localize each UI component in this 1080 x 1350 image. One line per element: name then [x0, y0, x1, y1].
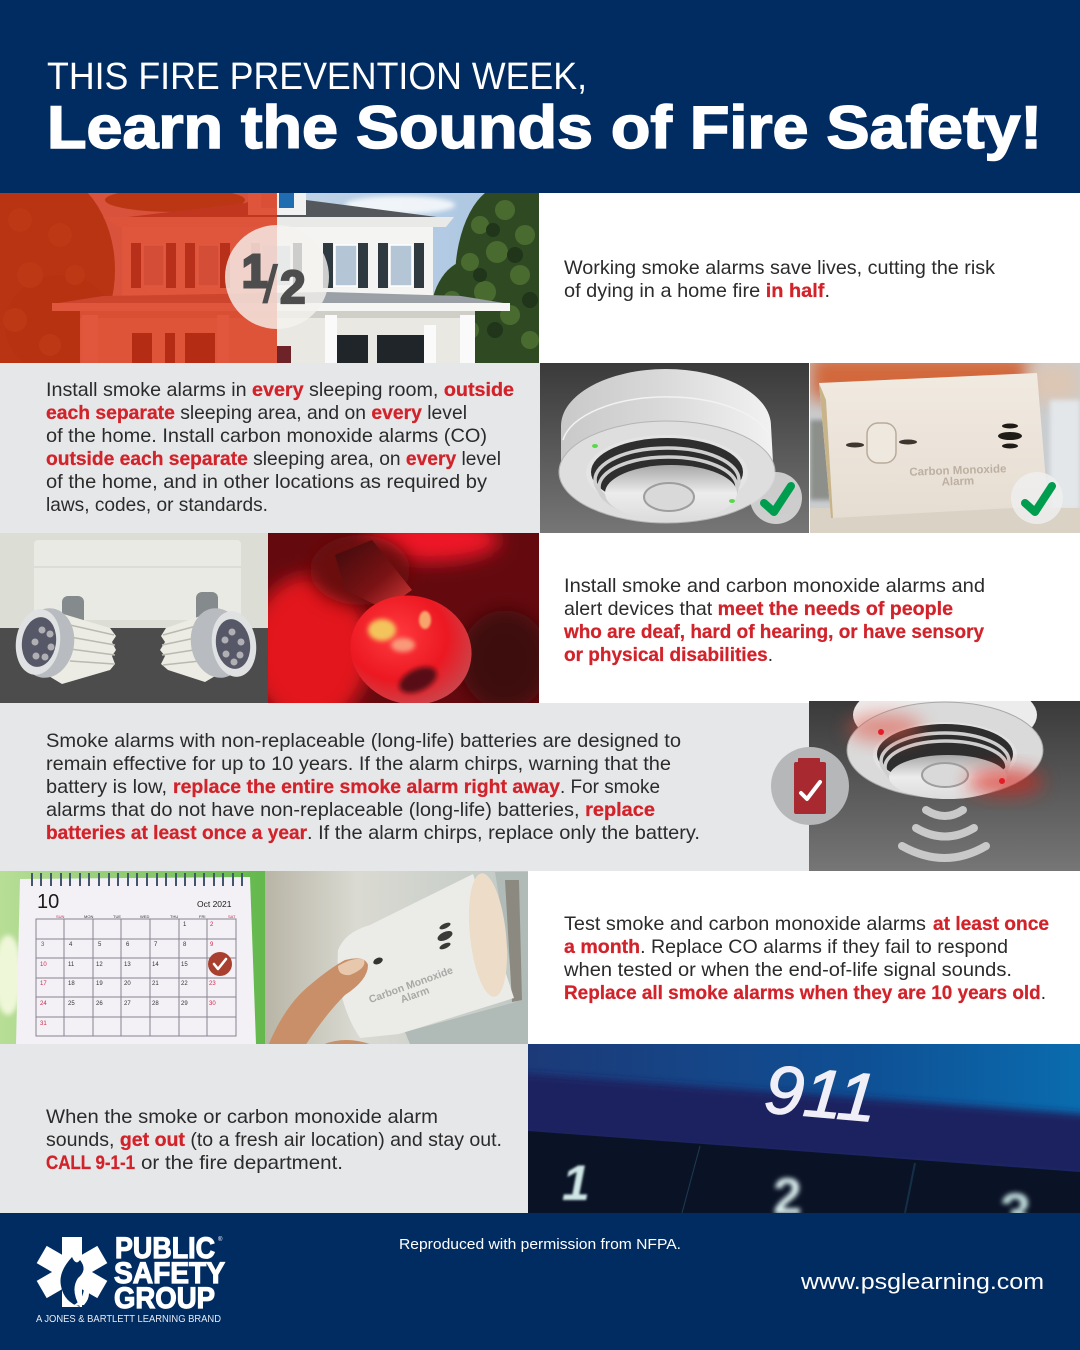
photo: calendar: 22	[181, 981, 188, 987]
photo: calendar: 28	[152, 1001, 159, 1007]
text: battery guidance: alarms that do not have non-replaceable (long-life) batteries, replace	[46, 799, 655, 821]
photo: calendar: 25	[68, 1001, 75, 1007]
photo: calendar: 31	[40, 1021, 47, 1027]
photo: house split with red overlay	[0, 193, 539, 363]
photo: calendar: SUN	[56, 914, 65, 919]
text: get out and call 9-1-1: CALL 9-1-1	[46, 1152, 135, 1174]
photo: 911 keypad display: 1	[562, 1155, 590, 1211]
photo: finger testing alarm: Alarm	[399, 984, 431, 1006]
text: battery guidance: batteries at least once a year	[46, 822, 307, 844]
photo: calendar: Oct 2021	[197, 899, 232, 909]
text: get out and call 9-1-1: sounds, get out (to a fresh air location) and stay out.	[46, 1129, 502, 1151]
logo: Public Safety Group: GROUP	[114, 1282, 215, 1315]
panel: get out and call	[0, 1044, 1080, 1213]
photo: calendar: 23	[209, 981, 216, 987]
icon: star of life with flame	[37, 1237, 107, 1307]
photo: calendar: 24	[40, 1001, 47, 1007]
text: smoke alarms save lives: Working smoke alarms save lives, cutting the risk	[564, 257, 995, 279]
photo: 911 keypad display: 911	[762, 1051, 880, 1137]
logo: Public Safety Group: PUBLIC	[115, 1232, 215, 1265]
photo: calendar: 10	[37, 891, 59, 913]
text: smoke alarms save lives: of dying in a home fire in half.	[564, 280, 830, 302]
text: get out and call 9-1-1: or the fire department.	[141, 1152, 343, 1174]
panel: half the risk	[0, 193, 995, 363]
photo: chirping smoke alarm	[809, 701, 1080, 871]
panel: alert devices	[0, 533, 984, 703]
text: test monthly: when tested or when the end-of-life signal sounds.	[563, 959, 1012, 981]
photo: calendar: 17	[40, 981, 47, 987]
text: where to install: outside each separate sleeping area, on every level	[46, 448, 501, 470]
text: where to install: each separate sleeping area, and on every level	[46, 402, 467, 424]
photo: calendar: 14	[152, 962, 159, 968]
text: battery guidance: remain effective for up to 10 years. If the alarm chirps, warning that the	[46, 753, 671, 775]
photo: finger testing alarm: Carbon Monoxide	[367, 964, 455, 1006]
text: get out and call 9-1-1: When the smoke or carbon monoxide alarm	[46, 1106, 438, 1128]
text: battery guidance	[46, 730, 700, 844]
photo: calendar: 10	[40, 962, 47, 968]
photo: carbon monoxide alarm with check	[810, 355, 1080, 533]
tree foliage	[0, 193, 539, 363]
text: deaf and hard of hearing: Install smoke and carbon monoxide alarms and	[564, 575, 985, 597]
photo: calendar: 11	[68, 962, 75, 968]
photo: finger testing alarm	[265, 871, 528, 1046]
text: deaf and hard of hearing: who are deaf, hard of hearing, or have sensory	[563, 621, 984, 643]
website: www.psglearning.com	[800, 1269, 1044, 1294]
photo: smoke alarm with check	[540, 363, 809, 533]
text: battery guidance: . If the alarm chirps, replace only the battery.	[307, 822, 700, 844]
photo: calendar: 29	[181, 1001, 188, 1007]
logo: Public Safety Group: A JONES & BARTLETT LEARNING BRAND	[36, 1313, 221, 1325]
title kicker: THIS FIRE PREVENTION WEEK,	[47, 56, 587, 98]
text: where to install: of the home. Install carbon monoxide alarms (CO)	[46, 425, 487, 447]
photo: calendar: 27	[124, 1001, 131, 1007]
text: get out and call 9-1-1	[46, 1106, 502, 1174]
photo: calendar: WED	[140, 914, 149, 919]
photo: calendar: 7	[154, 942, 158, 948]
photo: calendar: 3	[41, 942, 45, 948]
one-half badge: 2	[280, 261, 306, 313]
logo: Public Safety Group	[36, 1232, 225, 1325]
photo: calendar: 5	[98, 942, 102, 948]
red half overlay	[0, 193, 277, 363]
text: test monthly: a month. Replace CO alarms if they fail to respond	[564, 936, 1008, 958]
text: where to install: of the home, and in other locations as required by	[46, 471, 487, 493]
text: smoke alarms save lives	[564, 257, 995, 302]
icon: check badge	[1011, 472, 1063, 524]
text: test monthly: Replace all smoke alarms when they are 10 years old.	[564, 982, 1046, 1004]
photo: calendar: MON	[84, 914, 93, 919]
header banner	[0, 0, 1080, 193]
photo: strobe light fixtures	[0, 533, 268, 703]
text: where to install: laws, codes, or standards.	[46, 494, 268, 516]
photo: calendar: 9	[210, 942, 214, 948]
text: where to install	[46, 379, 514, 516]
text: battery guidance: battery is low,	[46, 776, 167, 798]
photo: carbon monoxide alarm with check: Alarm	[941, 475, 974, 489]
text: test monthly: at least once	[933, 913, 1049, 935]
photo: calendar: 20	[124, 981, 131, 987]
photo: calendar: SAT	[228, 914, 236, 919]
text: test monthly: Test smoke and carbon monoxide alarms	[564, 913, 926, 935]
photo: calendar: 8	[183, 942, 187, 948]
photo: calendar: FRI	[199, 914, 205, 919]
footer	[0, 1213, 1080, 1350]
photo: calendar: 30	[209, 1001, 216, 1007]
icon: battery check badge	[771, 747, 849, 825]
photo: calendar: 2	[210, 922, 214, 928]
one-half badge: 1	[242, 245, 268, 297]
one-half badge	[225, 225, 329, 329]
photo: 911 keypad display	[528, 1044, 1080, 1213]
photo: calendar: 4	[69, 942, 73, 948]
photo: calendar: 19	[96, 981, 103, 987]
photo: calendar: 6	[126, 942, 130, 948]
logo: Public Safety Group: ®	[218, 1236, 223, 1243]
text: battery guidance: replace the entire smoke alarm right away	[173, 776, 560, 798]
photo: calendar: 1	[183, 922, 187, 928]
text: deaf and hard of hearing: or physical disabilities.	[564, 644, 773, 666]
photo: calendar: THU	[170, 914, 178, 919]
panel: batteries	[0, 701, 1080, 871]
photo: calendar: 12	[96, 962, 103, 968]
photo: calendar: 21	[152, 981, 159, 987]
text: deaf and hard of hearing	[563, 575, 985, 666]
photo: calendar: 15	[181, 962, 188, 968]
panel: install alarms	[0, 355, 1080, 533]
panel: testing	[0, 871, 1049, 1046]
logo: Public Safety Group: SAFETY	[114, 1257, 225, 1290]
text: test monthly	[563, 913, 1049, 1004]
permission note: Reproduced with permission from NFPA.	[399, 1236, 681, 1253]
icon: check badge	[750, 472, 802, 524]
icon: sound waves	[902, 810, 986, 858]
text: deaf and hard of hearing: alert devices that meet the needs of people	[564, 598, 953, 620]
photo: calendar: 26	[96, 1001, 103, 1007]
photo: 911 keypad display: 3	[1000, 1181, 1031, 1244]
text: battery guidance: . For smoke	[560, 776, 660, 798]
text: where to install: Install smoke alarms in every sleeping room, outside	[46, 379, 514, 401]
photo: carbon monoxide alarm with check: Carbon Monoxide	[909, 463, 1007, 479]
photo: calendar: 13	[124, 962, 131, 968]
photo: 911 keypad display: 2	[773, 1168, 802, 1226]
title: Learn the Sounds of Fire Safety!	[47, 94, 1042, 161]
photo: calendar: TUE	[113, 914, 121, 919]
photo: calendar: 18	[68, 981, 75, 987]
text: battery guidance: Smoke alarms with non-replaceable (long-life) batteries are designed to	[46, 730, 681, 752]
one-half badge: /	[263, 256, 278, 314]
calendar rings	[32, 873, 242, 886]
icon: calendar check	[208, 952, 232, 976]
photo: calendar	[0, 871, 265, 1044]
photo: red strobe	[268, 533, 539, 703]
